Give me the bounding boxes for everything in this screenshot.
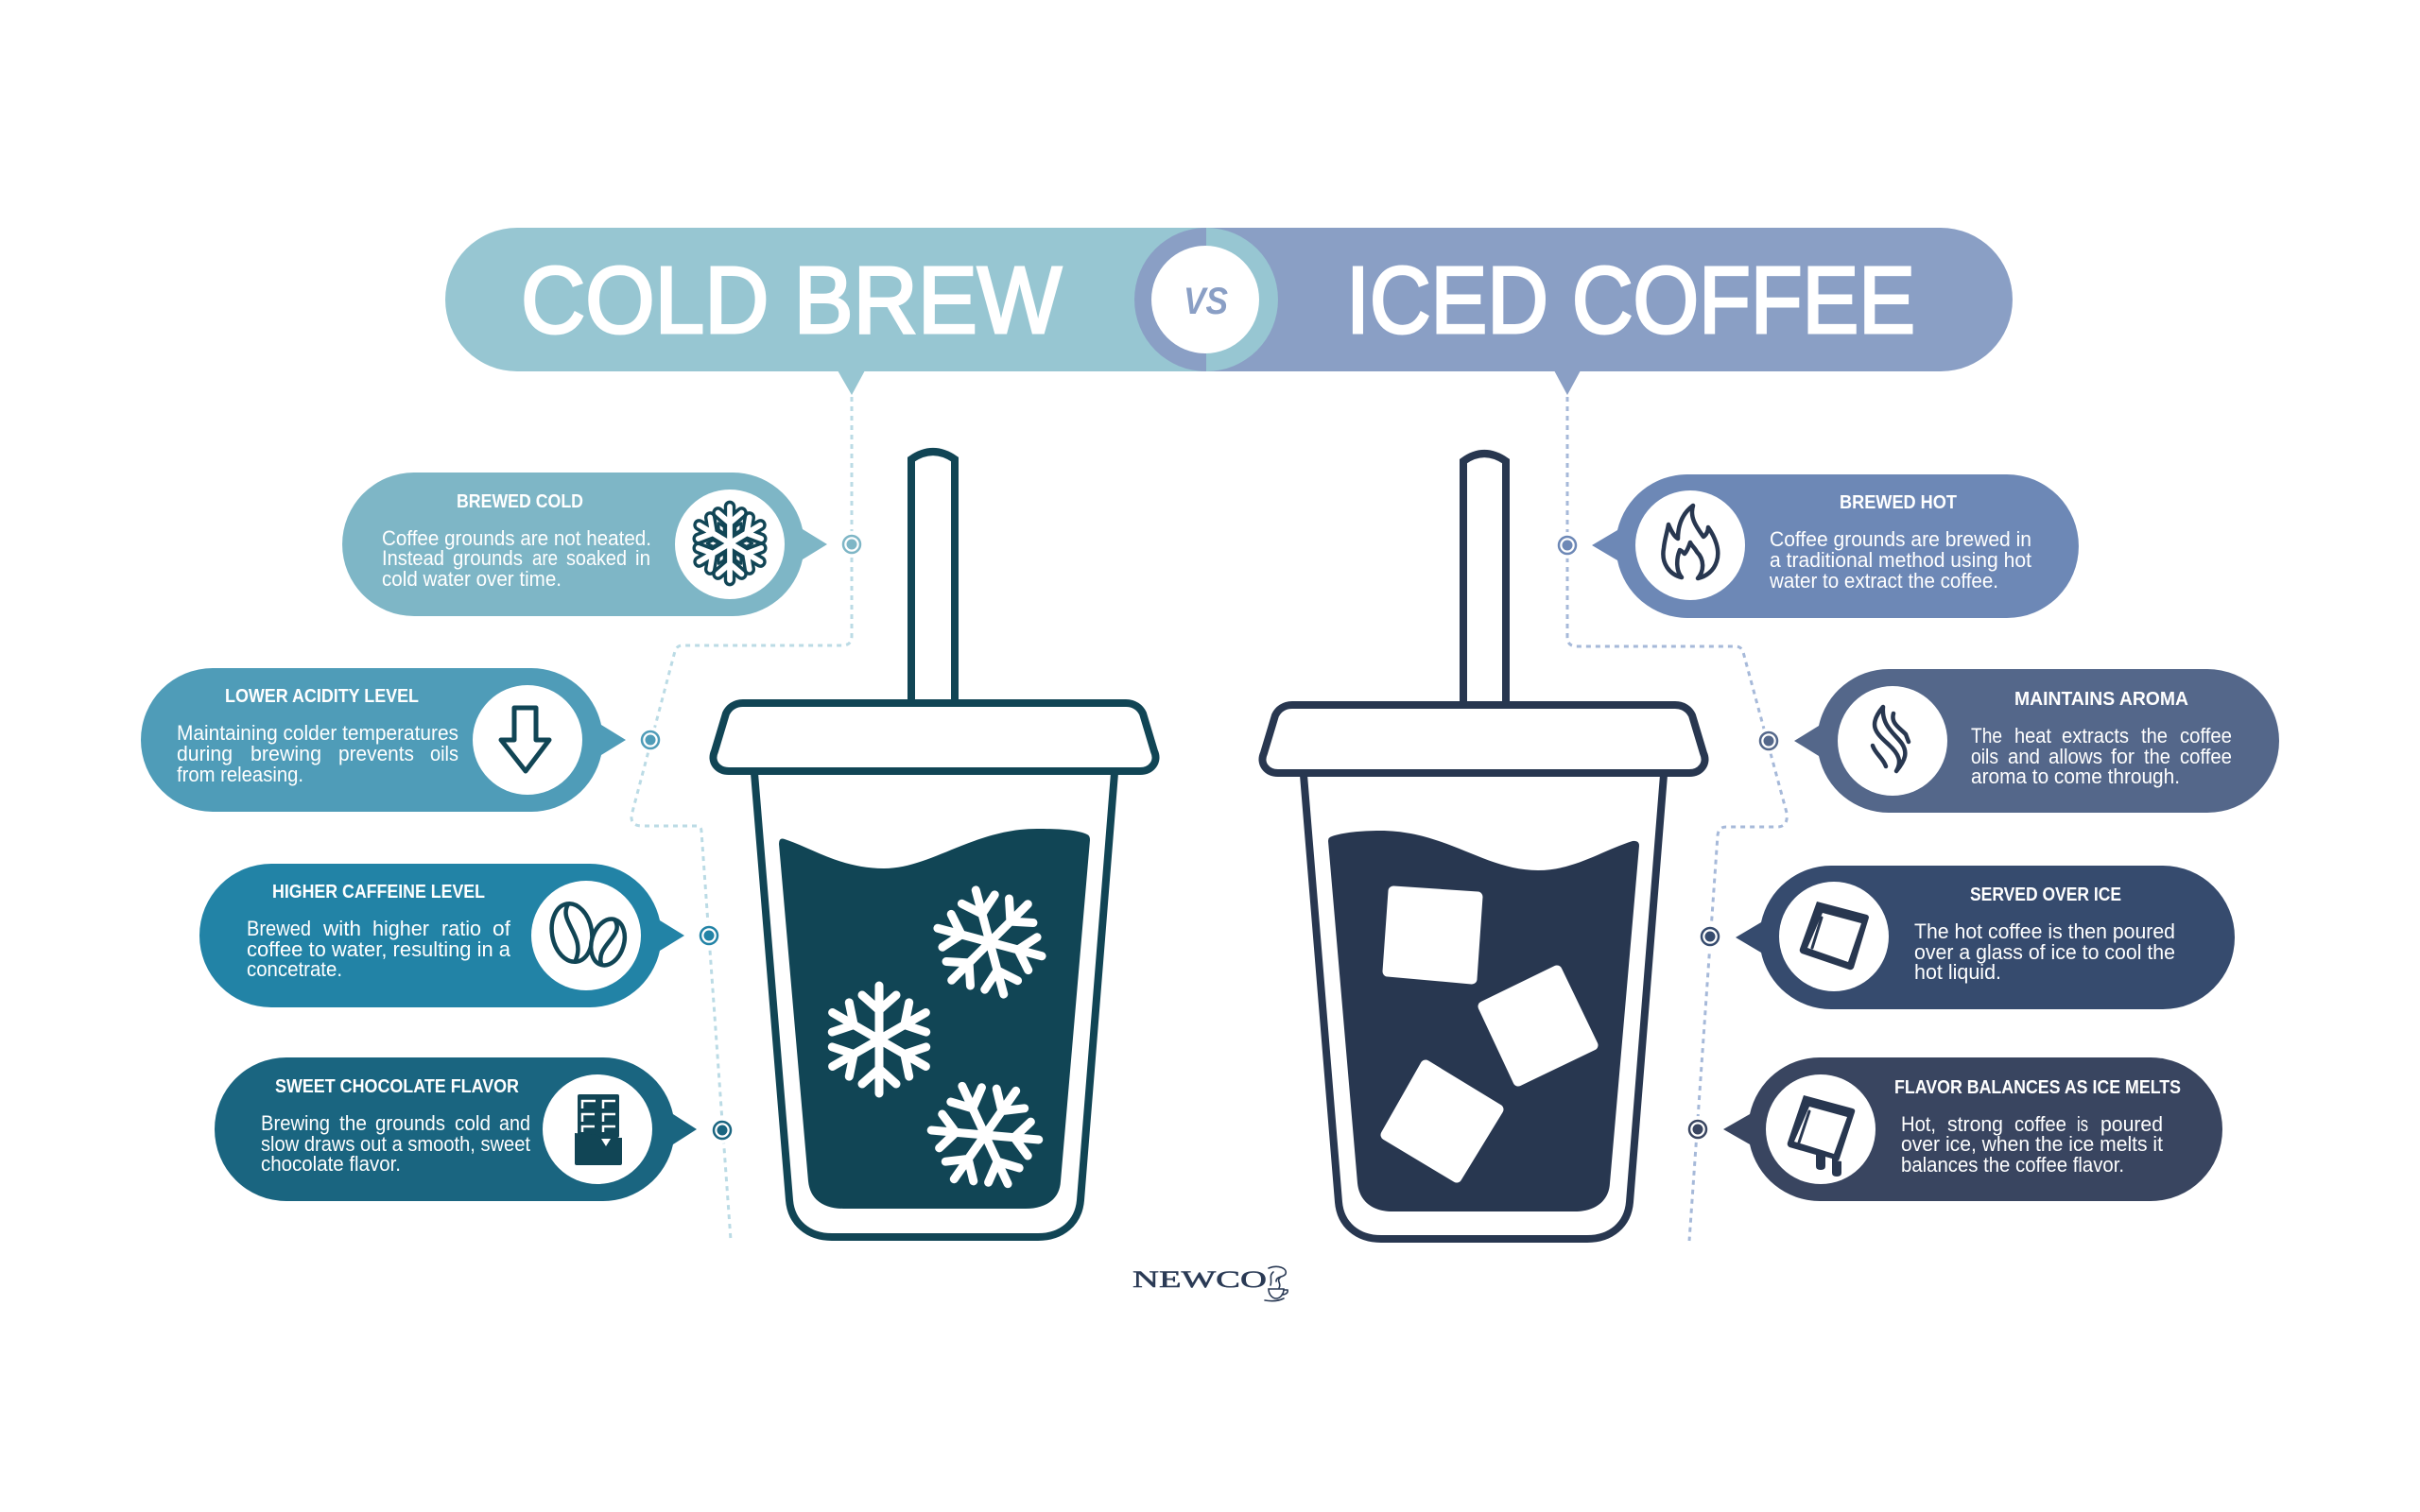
- snowflake 2: [824, 986, 934, 1093]
- heading: HIGHER CAFFEINE LEVEL: [272, 882, 485, 902]
- title: cold brew: COLD BREW: [521, 248, 1063, 353]
- description: over ice, when the ice melts it: [1901, 1132, 2163, 1156]
- icon: down arrow: [501, 708, 549, 771]
- cold brew cup: [713, 452, 1156, 1237]
- description: from releasing.: [177, 763, 303, 786]
- description: Hot,: [1901, 1112, 1936, 1136]
- description: the: [2144, 745, 2170, 768]
- banner: iced coffee half: [1206, 228, 2013, 371]
- icon: chocolate bar: [575, 1094, 622, 1165]
- vs ring left half: [1134, 228, 1206, 371]
- description: for: [2111, 745, 2135, 768]
- heading: SWEET CHOCOLATE FLAVOR: [275, 1076, 519, 1097]
- description: [1914, 919, 2175, 984]
- description: higher: [372, 917, 429, 940]
- icon: flame: [1663, 506, 1718, 578]
- banner pointer: iced coffee: [1554, 370, 1581, 395]
- icon: ice cube: [1800, 902, 1869, 970]
- ice cube 2: [1483, 971, 1593, 1081]
- description: [247, 917, 511, 981]
- description: of: [493, 917, 511, 940]
- icon: aroma steam: [1873, 707, 1909, 771]
- description: [1971, 724, 2232, 788]
- connector: cold brew dotted line: [631, 397, 852, 1240]
- description: is: [2077, 1112, 2088, 1136]
- heading: MAINTAINS AROMA: [2014, 689, 2188, 710]
- banner pointer: cold brew: [838, 370, 865, 395]
- description: The hot coffee is then poured: [1914, 919, 2175, 943]
- description: Coffee grounds are brewed in: [1770, 527, 2031, 551]
- logo wordmark: NEWCO: [1132, 1267, 1267, 1293]
- description: prevents: [338, 742, 414, 765]
- icon circle: [1766, 1074, 1876, 1184]
- icon: melting ice cube: [1788, 1095, 1855, 1177]
- panel: higher caffeine level: [199, 864, 684, 1007]
- icon circle: [531, 881, 641, 990]
- description: chocolate flavor.: [261, 1152, 401, 1176]
- description: coffee: [2014, 1112, 2066, 1136]
- icon circle: [1635, 490, 1745, 600]
- icon: snowflake: [693, 507, 767, 580]
- coffee liquid: [1328, 831, 1639, 1211]
- panel: sweet chocolate flavor: [215, 1057, 697, 1201]
- cold brew connector dots: [637, 531, 865, 1143]
- lid: [713, 703, 1156, 771]
- icon circle: [675, 490, 785, 599]
- heading: FLAVOR BALANCES AS ICE MELTS: [1894, 1077, 2181, 1098]
- panel: flavor balances as ice melts: [1723, 1057, 2222, 1201]
- description: coffee: [2180, 724, 2232, 747]
- ice cube 1: [1388, 891, 1478, 979]
- description: [1769, 527, 2031, 593]
- description: and: [499, 1111, 530, 1135]
- description: the: [339, 1111, 367, 1135]
- vs white circle: [1151, 246, 1259, 353]
- description: grounds: [375, 1111, 445, 1135]
- panel: lower acidity level: [141, 668, 626, 812]
- description: hot liquid.: [1914, 960, 2001, 984]
- description: poured: [2100, 1112, 2163, 1136]
- description: Brewing: [261, 1111, 330, 1135]
- description: slow draws out a smooth, sweet: [261, 1132, 530, 1156]
- description: Coffee grounds are not heated.: [382, 526, 651, 550]
- description: concetrate.: [247, 957, 342, 981]
- description: water to extract the coffee.: [1769, 569, 1998, 593]
- connector: iced coffee dotted line: [1567, 397, 1787, 1241]
- logo cup icon: [1265, 1266, 1288, 1301]
- description: Brewed: [247, 917, 311, 940]
- cup body: [754, 773, 1115, 1237]
- description: strong: [1947, 1112, 2003, 1136]
- description: cold water over time.: [382, 567, 562, 591]
- straw: [911, 452, 955, 700]
- vs ring right half: [1206, 228, 1278, 371]
- description: coffee: [2180, 745, 2232, 768]
- description: over a glass of ice to cool the: [1914, 940, 2175, 964]
- description: aroma to come through.: [1971, 765, 2180, 788]
- description: oils: [430, 742, 458, 765]
- coffee liquid: [779, 829, 1090, 1209]
- ice cube 3: [1386, 1065, 1498, 1177]
- description: are: [532, 546, 558, 570]
- icon circle: [1779, 882, 1889, 991]
- heading: BREWED HOT: [1840, 492, 1957, 513]
- description: The: [1971, 724, 2002, 747]
- description: cold: [455, 1111, 491, 1135]
- description: balances the coffee flavor.: [1901, 1153, 2124, 1177]
- description: a traditional method using hot: [1770, 548, 2031, 572]
- snowflake 3: [908, 1059, 1062, 1211]
- description: with: [322, 917, 361, 940]
- description: grounds: [453, 546, 523, 570]
- icon: coffee beans: [547, 901, 631, 970]
- cup body: [1304, 775, 1664, 1239]
- description: coffee to water, resulting in a: [247, 937, 511, 961]
- description: [382, 526, 651, 591]
- iced coffee connector dots: [1554, 532, 1782, 1143]
- description: extracts: [2062, 724, 2129, 747]
- banner: cold brew half: [445, 228, 1206, 371]
- lid: [1262, 705, 1705, 773]
- panel: served over ice: [1736, 866, 2235, 1009]
- panel: brewed hot: [1592, 474, 2079, 618]
- description: oils: [1971, 745, 1998, 768]
- iced coffee cup: [1262, 454, 1705, 1239]
- heading: LOWER ACIDITY LEVEL: [225, 686, 419, 707]
- description: during: [177, 742, 233, 765]
- snowflake 1: [923, 876, 1057, 1008]
- heading: BREWED COLD: [457, 491, 583, 512]
- icon circle: [1838, 686, 1947, 796]
- title: iced coffee: ICED COFFEE: [1346, 248, 1915, 353]
- description: [261, 1111, 530, 1176]
- description: soaked: [566, 546, 627, 570]
- description: in: [635, 546, 650, 570]
- description: [177, 721, 458, 786]
- description: heat: [2014, 724, 2051, 747]
- description: [1901, 1112, 2163, 1177]
- icon circle: [543, 1074, 652, 1184]
- vs label: VS: [1184, 281, 1228, 322]
- logo: newco: [1132, 1266, 1288, 1301]
- description: brewing: [251, 742, 321, 765]
- description: allows: [2048, 745, 2102, 768]
- icon circle: [473, 685, 582, 795]
- panel: maintains aroma: [1794, 669, 2279, 813]
- description: the: [2141, 724, 2168, 747]
- description: Maintaining colder temperatures: [177, 721, 458, 745]
- heading: SERVED OVER ICE: [1970, 885, 2121, 905]
- header banner: [445, 228, 2013, 395]
- panel: brewed cold: [342, 472, 827, 616]
- description: Instead: [382, 546, 444, 570]
- description: and: [2008, 745, 2040, 768]
- straw: [1463, 454, 1506, 702]
- description: ratio: [441, 917, 481, 940]
